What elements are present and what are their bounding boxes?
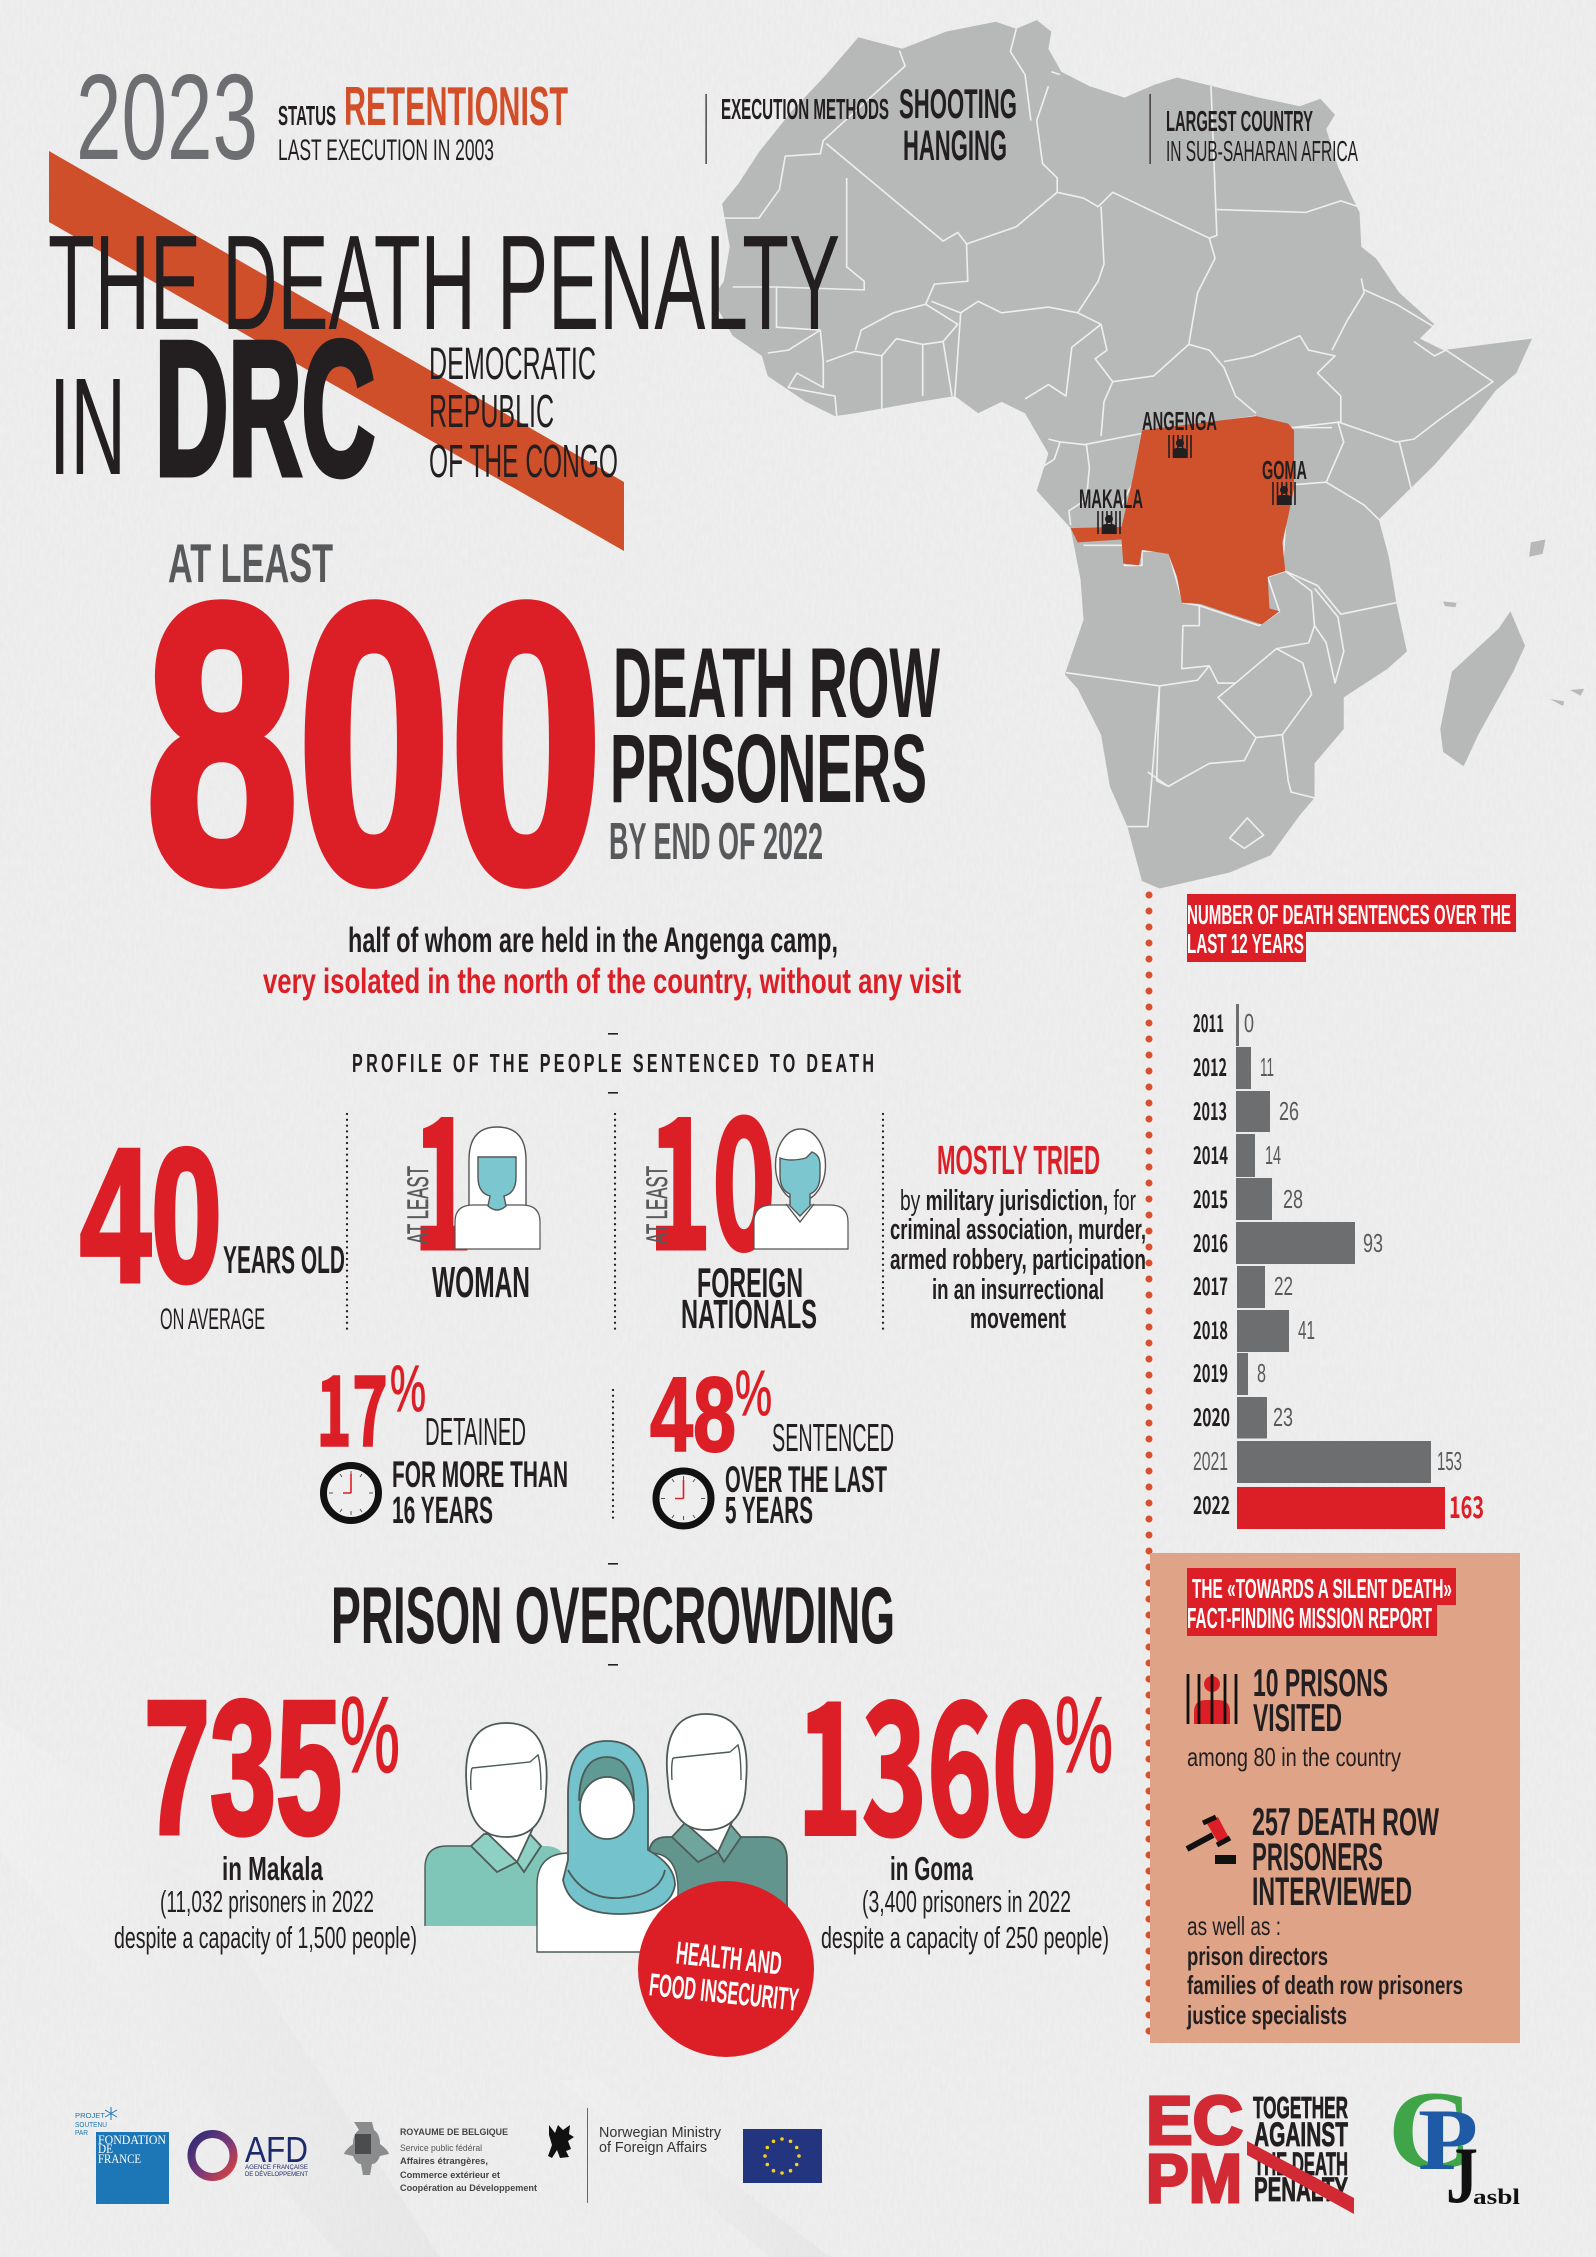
- Angenga note: half of whom are held in the Angenga camp,: [348, 921, 838, 960]
- callout: health and food insecurity: FOOD INSECURITY: [648, 1966, 800, 2018]
- headline statistic: BY END OF 2022: [609, 813, 823, 871]
- person: woman in hijab: [537, 1741, 678, 1952]
- mostly tried text: [890, 1137, 1146, 1335]
- callout: health and food insecurity: HEALTH AND: [674, 1935, 784, 1981]
- panel: fact-finding mission report: among 80 in the country: [1187, 1742, 1401, 1772]
- logo: AFD: AFD: [245, 2129, 308, 2170]
- logo: AFD: DE DÉVELOPPEMENT: [245, 2171, 308, 2178]
- logo: CPJ asbl: P: [1418, 2092, 1478, 2189]
- prison label: Goma: [1262, 455, 1307, 505]
- bar chart: 153: [1437, 1446, 1462, 1476]
- title: DEMOCRATIC: [429, 338, 596, 389]
- logo: Fondation de France: [75, 2107, 169, 2204]
- stat: Goma overcrowding: [797, 1625, 1113, 1955]
- logo: ECPM: TOGETHER: [1253, 2090, 1348, 2125]
- prison label: Makala: [1079, 484, 1143, 534]
- stat: average age: ON AVERAGE: [160, 1303, 265, 1336]
- stat: 48 percent sentenced: 5 YEARS: [725, 1490, 813, 1532]
- icon: prison bars: [1188, 1674, 1236, 1724]
- stat: Goma overcrowding: despite a capacity of 250 people): [821, 1920, 1109, 1955]
- mostly tried text: by military jurisdiction, for: [900, 1185, 1136, 1217]
- map: DRC highlighted: [1071, 416, 1294, 625]
- logo: Fondation de France: DE: [98, 2141, 113, 2156]
- stat: Makala overcrowding: (11,032 prisoners in 2022: [160, 1884, 374, 1919]
- stat: 17 percent detained: %: [390, 1351, 426, 1425]
- map: continent: [712, 20, 1532, 889]
- map: Madagascar and islands: [1440, 540, 1584, 766]
- logo: Belgium foreign affairs: ROYAUME DE BELGIQUE: [400, 2127, 508, 2137]
- headline statistic: DEATH ROW: [613, 627, 940, 738]
- stat: 17 percent detained: 17: [316, 1333, 388, 1474]
- person: right man: [649, 1714, 787, 1907]
- bar chart: 23: [1273, 1402, 1293, 1432]
- icon: veiled woman: [455, 1127, 540, 1249]
- bar chart: 28: [1283, 1184, 1303, 1214]
- logo: Fondation de France: PAR: [75, 2130, 88, 2137]
- stat: one woman: AT LEAST: [402, 1166, 435, 1244]
- logo: Fondation de France: PROJET: [75, 2113, 106, 2120]
- bar chart: 2017: [1193, 1267, 1228, 1302]
- bar chart: 2011: [1193, 1004, 1224, 1039]
- stat: 48 percent sentenced: 48: [650, 1356, 736, 1474]
- bar chart: 2021: [1193, 1446, 1228, 1476]
- stat: 17 percent detained: FOR MORE THAN: [392, 1454, 568, 1495]
- stat: 17 percent detained: DETAINED: [425, 1411, 526, 1454]
- profile heading: PROFILE OF THE PEOPLE SENTENCED TO DEATH: [352, 1048, 874, 1078]
- prison label: Goma: GOMA: [1262, 455, 1307, 485]
- stat: Makala overcrowding: 735: [144, 1662, 342, 1874]
- person: left man: [425, 1723, 566, 1926]
- red dotted separator: [1146, 895, 1152, 2043]
- panel: fact-finding mission report: [1150, 1553, 1520, 2043]
- logo: Belgium foreign affairs: Service public fédéral: [400, 2143, 482, 2153]
- status block: RETENTIONIST: [344, 75, 568, 137]
- mostly tried text: MOSTLY TRIED: [937, 1137, 1100, 1183]
- logo: Fondation de France: FRANCE: [98, 2151, 141, 2166]
- execution methods: [706, 80, 1017, 170]
- logo: CPJ asbl: J: [1446, 2132, 1478, 2220]
- callout: health and food insecurity: [638, 1881, 814, 2057]
- bar chart: 8: [1257, 1358, 1266, 1388]
- mostly tried text: armed robbery, participation: [890, 1244, 1146, 1276]
- bar chart: 2012: [1193, 1048, 1227, 1083]
- headline statistic: PRISONERS: [610, 714, 927, 823]
- title: OF THE CONGO: [429, 435, 618, 487]
- logo: ECPM: [1146, 2082, 1354, 2217]
- logo: European Union flag: [743, 2129, 822, 2183]
- logo: Fondation de France: FONDATION: [98, 2132, 167, 2147]
- mostly tried text: movement: [970, 1303, 1066, 1335]
- status block: LAST EXECUTION IN 2003: [278, 134, 494, 167]
- diagonal strike band: [49, 151, 624, 551]
- panel: death sentences chart: [1187, 894, 1516, 1529]
- bar chart: 2016: [1193, 1224, 1228, 1259]
- logo: AFD: [192, 2129, 308, 2178]
- stat: 17 percent detained: [316, 1333, 568, 1532]
- execution methods: EXECUTION METHODS: [721, 94, 889, 126]
- stat: Makala overcrowding: %: [340, 1674, 400, 1795]
- prison label: Angenga: ANGENGA: [1142, 406, 1217, 436]
- title: [48, 207, 840, 515]
- stat: one woman: WOMAN: [432, 1258, 530, 1307]
- title: IN: [49, 350, 126, 504]
- bar chart: 11: [1260, 1052, 1274, 1082]
- title: DRC: [155, 303, 375, 515]
- icon: clock: [656, 1471, 711, 1526]
- stat: ten foreign nationals: 10: [648, 1040, 776, 1302]
- panel: fact-finding mission report: families of death row prisoners: [1187, 1970, 1463, 2000]
- prison label: Angenga: [1142, 406, 1217, 458]
- mostly tried text: criminal association, murder,: [890, 1214, 1146, 1246]
- status block: [278, 75, 568, 167]
- bar chart: 26: [1279, 1096, 1299, 1126]
- logo: Belgium foreign affairs: Affaires étrangères,: [400, 2156, 488, 2166]
- panel: fact-finding mission report: prison directors: [1187, 1941, 1328, 1971]
- logo: ECPM: EC: [1146, 2082, 1243, 2159]
- title: THE DEATH PENALTY: [48, 207, 840, 358]
- mostly tried text: in an insurrectional: [932, 1274, 1104, 1306]
- bar chart: 41: [1298, 1315, 1315, 1345]
- panel: fact-finding mission report: 257 DEATH ROW: [1252, 1801, 1439, 1844]
- logo: Belgium foreign affairs: [344, 2122, 537, 2193]
- logo: Norwegian Ministry of Foreign Affairs: Norwegian Ministry: [599, 2124, 721, 2141]
- bar chart: 2019: [1193, 1354, 1228, 1389]
- bar chart: 2015: [1193, 1180, 1228, 1215]
- status block: STATUS: [278, 100, 336, 131]
- icon: man: [754, 1129, 848, 1249]
- stat: 48 percent sentenced: OVER THE LAST: [725, 1459, 887, 1500]
- panel: fact-finding mission report: 10 PRISONS: [1253, 1662, 1388, 1705]
- overcrowding heading: PRISON OVERCROWDING: [331, 1571, 895, 1661]
- stat: Makala overcrowding: despite a capacity of 1,500 people): [114, 1920, 417, 1955]
- stat: average age: YEARS OLD: [223, 1239, 345, 1282]
- bar chart: 2013: [1193, 1092, 1227, 1127]
- logo: Belgium foreign affairs: Coopération au Développement: [400, 2183, 537, 2193]
- title: REPUBLIC: [429, 385, 554, 437]
- stat: one woman: 1: [413, 1040, 473, 1302]
- stat: Goma overcrowding: in Goma: [890, 1850, 973, 1887]
- icon: gavel: [1187, 1817, 1236, 1864]
- stat: 48 percent sentenced: [650, 1356, 894, 1532]
- execution methods: HANGING: [903, 122, 1007, 170]
- logo: Norwegian Ministry of Foreign Affairs: [548, 2108, 721, 2203]
- logo: Belgium foreign affairs: Commerce extérieur et: [400, 2170, 500, 2180]
- stat: 17 percent detained: 16 YEARS: [392, 1490, 493, 1532]
- logo: CPJ asbl: C: [1388, 2069, 1472, 2193]
- headline statistic: 800: [146, 525, 602, 963]
- stat: Goma overcrowding: (3,400 prisoners in 2022: [862, 1884, 1071, 1919]
- Angenga note: very isolated in the north of the country, without any visit: [263, 962, 961, 1001]
- chart heading: LAST 12 YEARS: [1187, 928, 1304, 959]
- bar chart: 2022: [1193, 1486, 1230, 1521]
- largest country: IN SUB-SAHARAN AFRICA: [1166, 136, 1358, 168]
- largest country: LARGEST COUNTRY: [1166, 106, 1313, 138]
- Angenga note: [263, 921, 961, 1001]
- execution methods: SHOOTING: [899, 80, 1017, 127]
- logo: ECPM: PENALTY: [1254, 2171, 1348, 2209]
- panel: fact-finding mission report: PRISONERS: [1252, 1836, 1383, 1879]
- year: 2023: [76, 49, 258, 185]
- bar chart: 14: [1265, 1140, 1281, 1170]
- stat: 48 percent sentenced: %: [735, 1357, 772, 1429]
- logo: ECPM: THE DEATH: [1254, 2146, 1348, 2182]
- chart heading: [1187, 894, 1516, 962]
- bar chart: 93: [1363, 1228, 1383, 1258]
- prison label: Makala: MAKALA: [1079, 484, 1143, 514]
- stat: ten foreign nationals: NATIONALS: [681, 1291, 817, 1337]
- bar chart: 163: [1449, 1483, 1484, 1527]
- bar chart: [1193, 1004, 1484, 1529]
- stat: Goma overcrowding: 1360: [797, 1625, 1057, 1887]
- panel: fact-finding mission report: justice specialists: [1186, 2000, 1347, 2030]
- bar chart: 0: [1244, 1008, 1254, 1038]
- logo: ECPM: AGAINST: [1254, 2116, 1348, 2154]
- stat: 48 percent sentenced: SENTENCED: [772, 1417, 894, 1460]
- bar chart: 2014: [1193, 1136, 1228, 1171]
- stat: Makala overcrowding: [114, 1662, 417, 1955]
- stat: Makala overcrowding: in Makala: [222, 1850, 323, 1887]
- stat: average age: 40: [80, 1110, 222, 1322]
- stat: ten foreign nationals: AT LEAST: [641, 1166, 674, 1244]
- headline statistic: AT LEAST: [168, 532, 333, 594]
- logo: ECPM: PM: [1146, 2140, 1242, 2217]
- panel: fact-finding mission report: INTERVIEWED: [1252, 1870, 1412, 1914]
- bar chart: 2020: [1193, 1398, 1230, 1433]
- logo: Fondation de France: SOUTENU: [75, 2122, 107, 2129]
- illustration: three people: [425, 1714, 787, 1952]
- panel: fact-finding mission report: VISITED: [1253, 1697, 1342, 1740]
- logo: CPJ asbl: asbl: [1473, 2184, 1520, 2209]
- bar chart: 2018: [1193, 1311, 1228, 1346]
- panel: fact-finding mission report: as well as :: [1187, 1911, 1281, 1941]
- logo: AFD: AGENCE FRANÇAISE: [245, 2165, 308, 2171]
- logo: CPJ asbl: [1388, 2069, 1520, 2220]
- panel heading: [1187, 1568, 1456, 1636]
- largest country: [1150, 94, 1358, 168]
- map of Africa: [712, 20, 1584, 889]
- stat: ten foreign nationals: FOREIGN: [697, 1259, 803, 1306]
- bar chart: 22: [1274, 1271, 1293, 1301]
- logo: Norwegian Ministry of Foreign Affairs: of Foreign Affairs: [599, 2139, 707, 2156]
- stat: Goma overcrowding: %: [1055, 1674, 1113, 1795]
- icon: clock: [324, 1466, 378, 1520]
